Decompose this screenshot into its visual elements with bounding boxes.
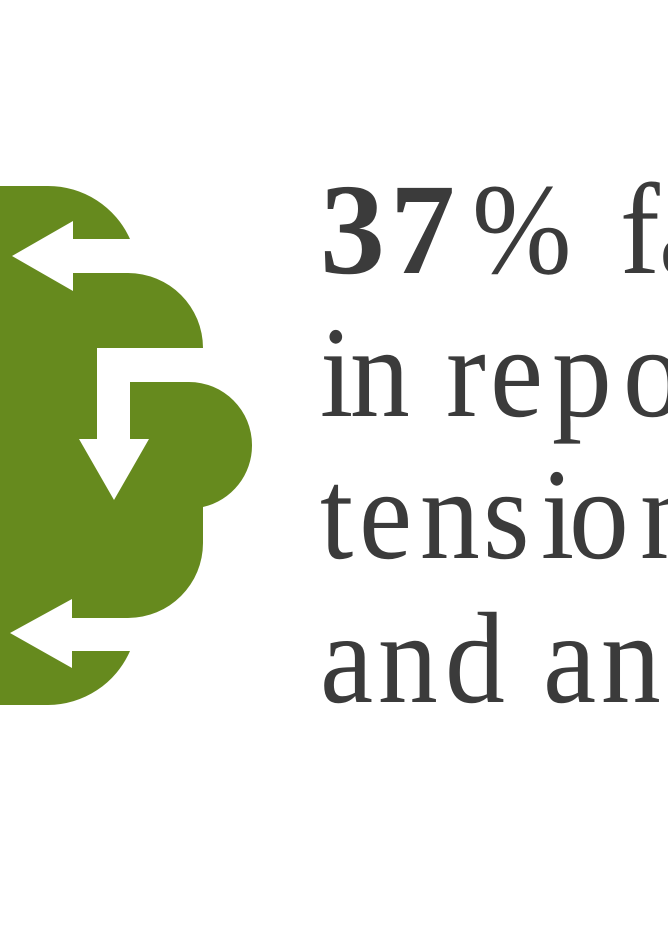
statistic text xyxy=(320,158,668,731)
icon: green head profile with arrows xyxy=(0,186,252,705)
line 1: 37: 37 xyxy=(320,158,455,302)
line 4: and an: and an xyxy=(320,588,661,731)
